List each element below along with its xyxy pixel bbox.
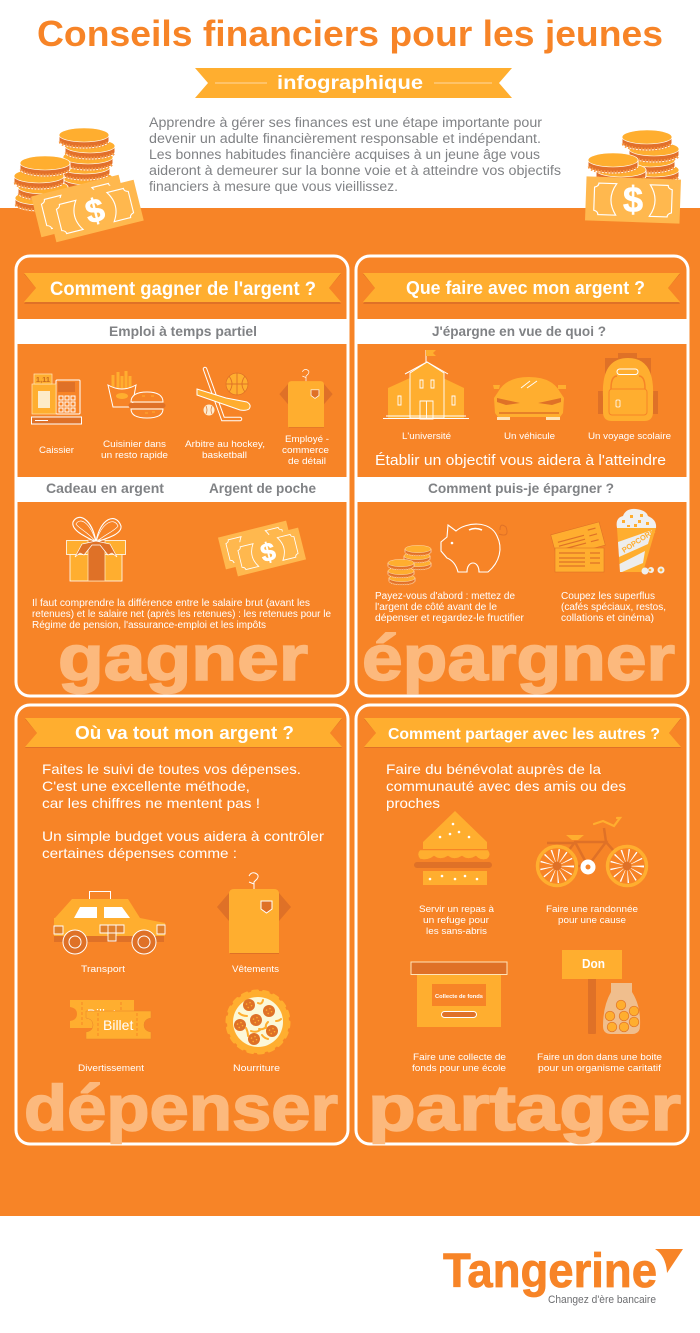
logo: tangerine: Tangerine — [443, 1245, 657, 1298]
icon: school — [383, 350, 469, 419]
icon: billets: Billet — [87, 1007, 117, 1022]
label: collecte — [412, 1052, 506, 1074]
icon: cash register: 1,11 — [36, 375, 50, 384]
ribbon: ou va — [25, 718, 342, 748]
ribbon: que faire: Que faire avec mon argent ? — [406, 278, 645, 298]
orange background band — [0, 208, 700, 1216]
icon: popcorn: POPCORN — [620, 526, 657, 555]
icon: piggy bank — [441, 524, 507, 572]
watermark: depenser: dépenser — [24, 1072, 338, 1144]
icon: coins and bill right: $ — [623, 179, 643, 220]
intro text — [149, 115, 561, 194]
icon: billets: Billet — [103, 1017, 133, 1033]
label: arbitre: Arbitre au hockey, — [185, 439, 265, 450]
heading: argent de poche: Argent de poche — [209, 480, 316, 496]
label: vetements: Vêtements — [232, 964, 279, 975]
heading: cadeau en argent: Cadeau en argent — [46, 480, 164, 496]
icon: taxi — [54, 892, 165, 954]
logo: tangerine: Changez d'ère bancaire — [548, 1294, 656, 1306]
label: transport: Transport — [81, 964, 125, 975]
label: servir: Servir un repas à — [419, 904, 495, 915]
label: randonnee: pour une cause — [558, 915, 626, 926]
text: superflus: collations et cinéma) — [561, 613, 654, 624]
label: caissier: Caissier — [39, 445, 74, 456]
text: benevolat — [386, 761, 626, 811]
label: randonnee — [546, 904, 638, 926]
heading: comment epargner: Comment puis-je épargner ? — [428, 480, 614, 496]
intro text: devenir un adulte financièrement responsable et indépendant. — [149, 131, 541, 146]
label: universite: L'université — [402, 431, 451, 442]
intro text: Apprendre à gérer ses finances est une étape importante pour — [149, 115, 543, 130]
label: don: pour un organisme caritatif — [538, 1063, 661, 1074]
icon: bicycle — [538, 818, 646, 886]
intro text: Les bonnes habitudes financière acquises à un jeune âge vous — [149, 147, 540, 162]
label: collecte: fonds pour une école — [412, 1063, 506, 1074]
icon: coins and bills left: $ — [81, 190, 108, 231]
text: payez-vous: l'argent de côté avant de le — [375, 602, 497, 613]
text: salaire: Il faut comprendre la différence entre le salaire brut (avant les — [32, 598, 310, 609]
text: suivi — [42, 761, 324, 861]
ribbon: ou va: Où va tout mon argent ? — [75, 723, 294, 743]
watermark: gagner: gagner — [58, 622, 308, 694]
label: cuisinier — [101, 439, 168, 461]
text: objectif: Établir un objectif vous aidera à l'atteindre — [375, 452, 666, 469]
icon: don sign and jar: Don — [582, 956, 605, 971]
text: payez-vous: Payez-vous d'abord : mettez de — [375, 591, 515, 602]
text: suivi: certaines dépenses comme : — [42, 845, 237, 861]
text: payez-vous — [375, 591, 525, 624]
label: employe: Employé - — [285, 434, 329, 445]
label: cuisinier: un resto rapide — [101, 450, 168, 461]
icon: fundraising box — [411, 962, 507, 1027]
label: servir — [419, 904, 495, 937]
panel: partager — [356, 705, 688, 1144]
title: Conseils financiers pour les jeunes — [37, 13, 663, 54]
label: don: Faire un don dans une boite — [537, 1052, 662, 1063]
label: randonnee: Faire une randonnée — [546, 904, 638, 915]
label: arbitre — [185, 439, 265, 461]
icon: popcorn — [617, 509, 664, 574]
text: superflus: (cafés spéciaux, restos, — [561, 602, 666, 613]
icon: billets — [70, 1000, 151, 1039]
icon: tickets — [551, 522, 605, 572]
intro text: financiers à mesure que vous vieillissez. — [149, 179, 398, 194]
ribbon: gagner: Comment gagner de l'argent ? — [50, 279, 316, 300]
icon: don sign and jar — [562, 950, 640, 1034]
text: suivi: car les chiffres ne mentent pas ! — [42, 795, 260, 811]
text: benevolat: Faire du bénévolat auprès de la — [386, 761, 601, 777]
text: benevolat: proches — [386, 795, 440, 811]
icon: bills: $ — [257, 536, 279, 568]
label: employe: commerce — [282, 445, 329, 456]
label: collecte: Faire une collecte de — [413, 1052, 506, 1063]
panel: que faire — [356, 256, 688, 696]
watermark: partager: partager — [368, 1072, 681, 1144]
text: salaire — [32, 598, 331, 631]
label: divertissement: Divertissement — [78, 1063, 144, 1074]
icon: gift — [66, 517, 126, 581]
label: voyage: Un voyage scolaire — [588, 431, 671, 442]
subtitle ribbon — [195, 68, 512, 98]
icon: coins stacks — [388, 545, 431, 585]
panel: comment gagner — [16, 256, 348, 696]
text: superflus — [561, 591, 666, 624]
icon: car — [493, 377, 566, 420]
heading: emploi: Emploi à temps partiel — [109, 323, 257, 339]
icon: hockey stick, bat, balls — [197, 369, 250, 419]
label: servir: les sans-abris — [426, 926, 487, 937]
subtitle ribbon: infographique — [277, 73, 423, 94]
icon: cash register — [32, 374, 82, 424]
text: salaire: retenues) et le salaire net (après les retenues) : les retenues pour le — [32, 609, 331, 620]
label: employe: de détail — [288, 456, 326, 467]
text: suivi: C'est une excellente méthode, — [42, 778, 250, 794]
intro text: aideront à demeurer sur la bonne voie et à atteindre vos objectifs — [149, 163, 561, 178]
ribbon: partager: Comment partager avec les autres ? — [388, 726, 660, 743]
icon: t-shirt on hanger — [279, 369, 333, 428]
label: vehicule: Un véhicule — [504, 431, 555, 442]
text: salaire: Régime de pension, l'assurance-emploi et les impôts — [32, 620, 266, 631]
panel: ou va mon argent — [16, 705, 348, 1144]
icon: t-shirt large — [217, 873, 291, 954]
label: nourriture: Nourriture — [233, 1063, 280, 1074]
text: suivi: Faites le suivi de toutes vos dépenses. — [42, 761, 301, 777]
icon: fries and burger — [108, 371, 163, 418]
icon: coins and bill right — [585, 130, 681, 224]
text: payez-vous: dépenser et regardez-le fructifier — [375, 613, 525, 624]
label: employe — [282, 434, 329, 467]
ribbon: partager — [364, 718, 681, 748]
icon: backpack — [598, 353, 658, 421]
text: benevolat: communauté avec des amis ou des — [386, 778, 626, 794]
icon: pizza — [227, 991, 289, 1053]
label: servir: un refuge pour — [423, 915, 489, 926]
watermark: epargner: épargner — [362, 622, 675, 694]
icon: sandwich — [417, 811, 490, 885]
ribbon: que faire — [363, 273, 680, 304]
icon: bills — [218, 521, 306, 576]
text: suivi: Un simple budget vous aidera à contrôler — [42, 828, 324, 844]
label: cuisinier: Cuisinier dans — [103, 439, 166, 450]
label: don — [537, 1052, 662, 1074]
text: superflus: Coupez les superflus — [561, 591, 655, 602]
icon: fundraising box: Collecte de fonds — [435, 994, 483, 1000]
ribbon: gagner — [24, 273, 341, 304]
heading: en vue de quoi: J'épargne en vue de quoi ? — [432, 323, 606, 339]
icon: coins and bills left — [14, 128, 144, 242]
label: arbitre: basketball — [202, 450, 247, 461]
